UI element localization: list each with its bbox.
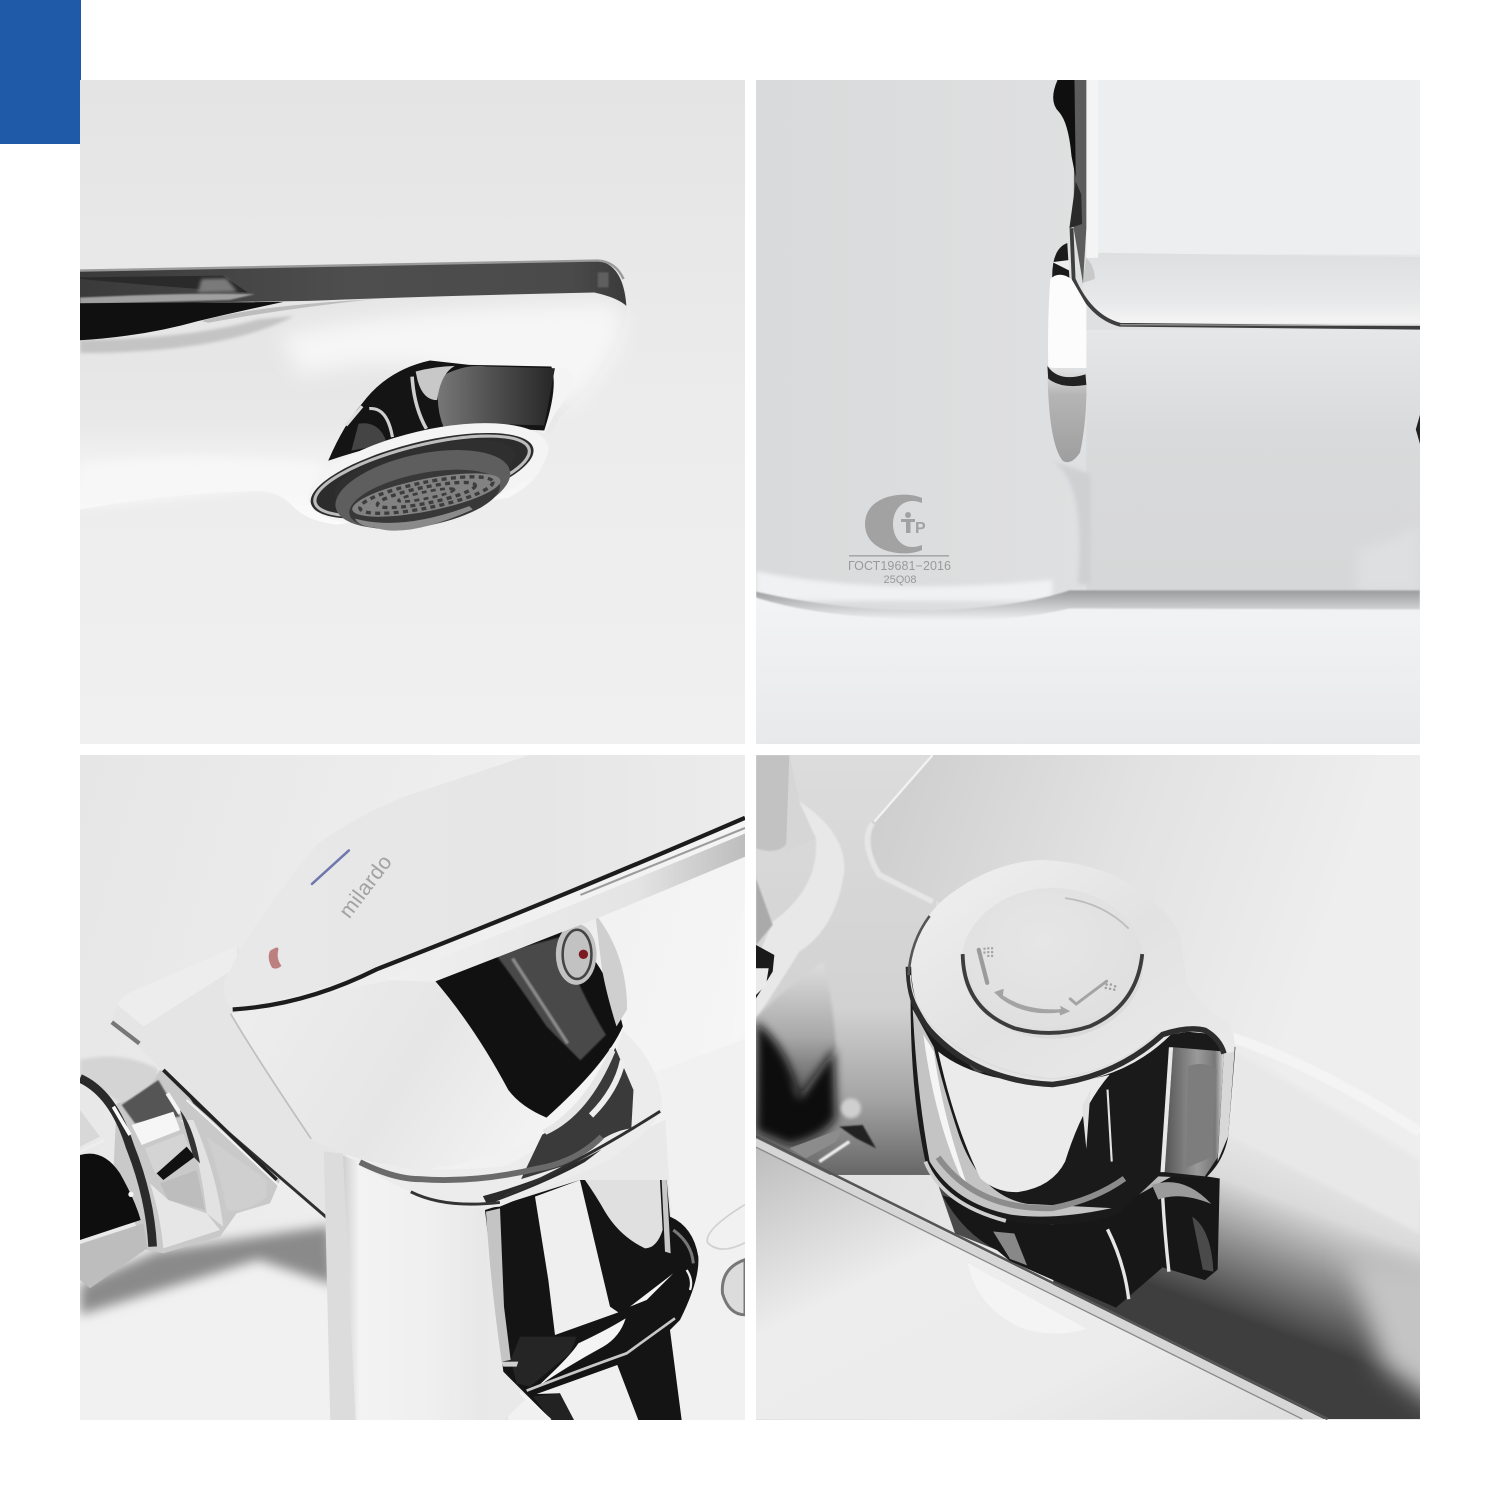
handle <box>224 755 745 1170</box>
blue corner tab <box>0 0 81 144</box>
aerator ring <box>358 423 540 452</box>
certification mark: 25Q08 <box>883 574 917 586</box>
figure sign <box>901 512 915 533</box>
red mark <box>269 947 281 969</box>
panel: spout aerator photo <box>80 80 745 744</box>
left connector <box>80 1056 280 1288</box>
lower body glow <box>756 571 1052 601</box>
mixer body upper <box>324 1152 508 1420</box>
back plate <box>292 1136 346 1212</box>
blue mark <box>312 850 349 884</box>
icon: rotation arrow <box>994 989 1070 1015</box>
spout body <box>80 261 627 525</box>
brand name: milardo <box>335 851 397 923</box>
icon: hand shower <box>979 947 993 983</box>
upper box <box>1053 80 1420 328</box>
knob reflection <box>942 1172 1220 1308</box>
certification mark: Р <box>915 520 926 537</box>
panel: mixer handle photo <box>80 755 745 1420</box>
diverter button <box>1024 992 1136 1038</box>
knob top <box>908 860 1235 1084</box>
knob cylinder <box>911 1001 1235 1225</box>
wall surfaces <box>334 1039 745 1420</box>
aerator housing <box>310 360 558 531</box>
certification mark: ГОСТ19681−2016 <box>848 559 951 573</box>
panel: certification mark photo <box>756 80 1420 744</box>
black reflection <box>80 302 284 340</box>
top chrome band <box>80 261 626 306</box>
floor <box>756 591 1420 744</box>
lower surface <box>756 1147 1307 1419</box>
right outlet <box>706 1204 745 1316</box>
collar <box>358 1048 661 1208</box>
handle top lever <box>442 755 744 941</box>
panel: diverter knob photo <box>756 755 1451 1420</box>
mixer body lower chrome <box>485 1180 698 1420</box>
chrome plate <box>1052 1146 1420 1419</box>
basin and left riser <box>756 755 998 1175</box>
lever fin <box>1165 1047 1224 1176</box>
logo <box>865 495 922 553</box>
certification mark <box>848 495 951 586</box>
icon: spout <box>1070 981 1116 1004</box>
slot reflection <box>1047 243 1087 462</box>
right wall <box>1086 395 1420 590</box>
